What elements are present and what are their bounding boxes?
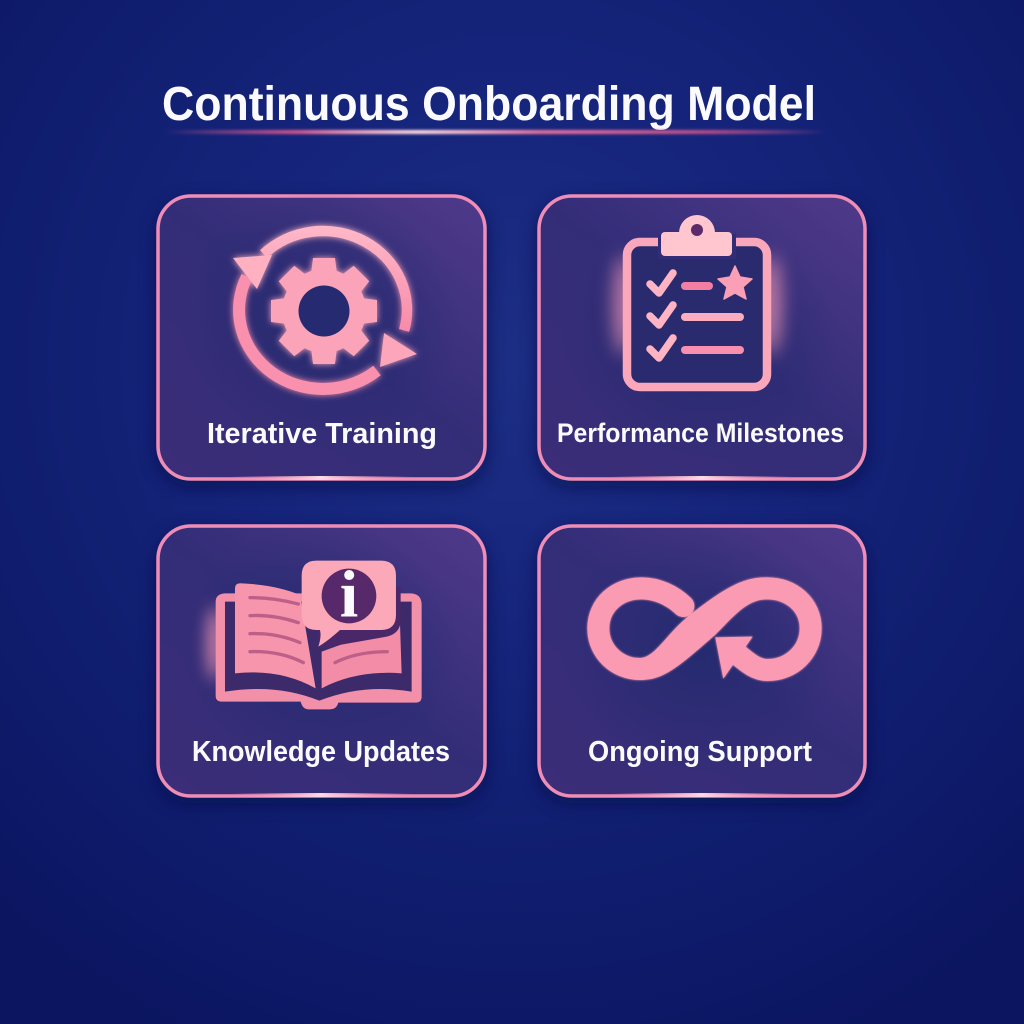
panel: Knowledge Updates <box>157 525 486 803</box>
icon: open book with info speech bubble <box>207 558 422 709</box>
label: Knowledge Updates <box>192 736 450 768</box>
title underline glow <box>165 130 825 134</box>
label: Iterative Training <box>207 418 437 450</box>
title: Continuous Onboarding Model <box>162 78 816 131</box>
icon glow <box>614 255 781 355</box>
icon: open book with info speech bubble: i <box>340 558 358 631</box>
panel: Iterative Training <box>157 190 486 486</box>
icon: gear inside circular arrows <box>233 231 417 389</box>
label: Ongoing Support <box>588 736 812 768</box>
panel: Performance Milestones <box>538 196 866 486</box>
panel: Ongoing Support <box>538 525 866 803</box>
icon: clipboard checklist with star <box>627 215 767 387</box>
icon: infinity loop with arrow <box>598 577 811 680</box>
label: Performance Milestones <box>557 418 844 448</box>
